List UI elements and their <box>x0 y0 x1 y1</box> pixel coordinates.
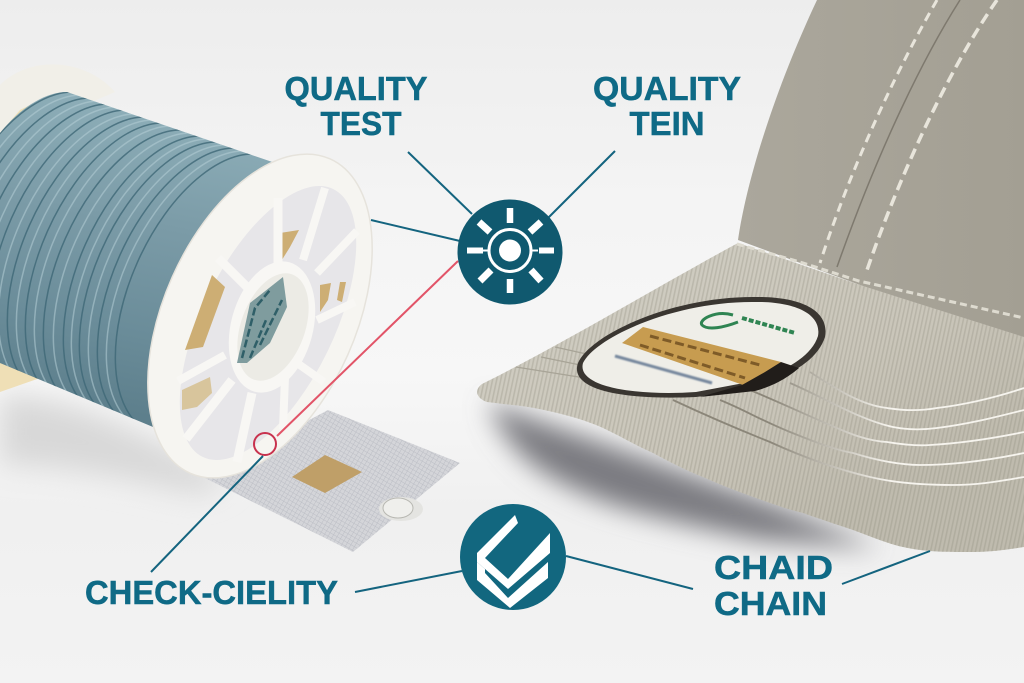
crown seam stitches <box>820 0 997 270</box>
brim stitching <box>673 372 1024 485</box>
patch dark corner <box>700 362 799 397</box>
line: chaid left <box>566 556 693 589</box>
patch border <box>577 297 826 398</box>
thread body <box>0 92 290 432</box>
line: check-cielity up <box>151 456 263 572</box>
line: chaid right <box>842 551 930 584</box>
label: quality tein: QUALITY <box>593 70 741 107</box>
spool spokes <box>178 188 357 462</box>
label: chaid: CHAID <box>714 549 833 586</box>
cap <box>477 0 1024 552</box>
patch gold band <box>622 327 781 387</box>
icon: double check <box>460 504 566 610</box>
gold patch <box>292 455 362 493</box>
line: check-cielity <box>355 571 462 592</box>
patch dark band details <box>640 336 760 378</box>
spool cream core <box>0 100 40 392</box>
cap brim <box>477 243 1024 552</box>
patch logo <box>701 314 738 328</box>
line: red <box>277 261 458 436</box>
brim twill texture <box>477 243 1024 552</box>
gold fibres inside spool <box>182 230 346 410</box>
thread spool <box>0 88 373 479</box>
marker: red circle <box>254 433 276 455</box>
label: chain: CHAIN <box>714 585 827 622</box>
spool back flange <box>0 64 115 140</box>
patch face <box>582 302 818 393</box>
front flange <box>102 120 418 512</box>
cap crown <box>738 0 1024 345</box>
connector lines <box>151 151 930 592</box>
label: check-cielity: CHECK-CIELITY <box>85 574 338 611</box>
button <box>379 497 423 521</box>
thread seen through hole <box>237 277 287 363</box>
mesh fabric swatch <box>203 410 460 552</box>
patch small print <box>615 356 712 383</box>
band stitching <box>737 244 1024 318</box>
line: spool <box>371 220 460 241</box>
line: quality tein <box>548 151 615 218</box>
label: quality test: QUALITY <box>284 70 428 107</box>
flange inner well <box>143 160 393 486</box>
shadow under spool <box>0 395 230 495</box>
shadow under cap <box>488 402 880 548</box>
label: tein: TEIN <box>630 105 704 142</box>
line: quality test <box>408 152 472 214</box>
icon: sun gauge <box>458 200 562 304</box>
thread windings <box>0 92 252 420</box>
spool hub <box>215 252 329 402</box>
cap patch <box>577 297 826 398</box>
label: test: TEST <box>320 105 402 142</box>
spool hole <box>224 263 322 391</box>
